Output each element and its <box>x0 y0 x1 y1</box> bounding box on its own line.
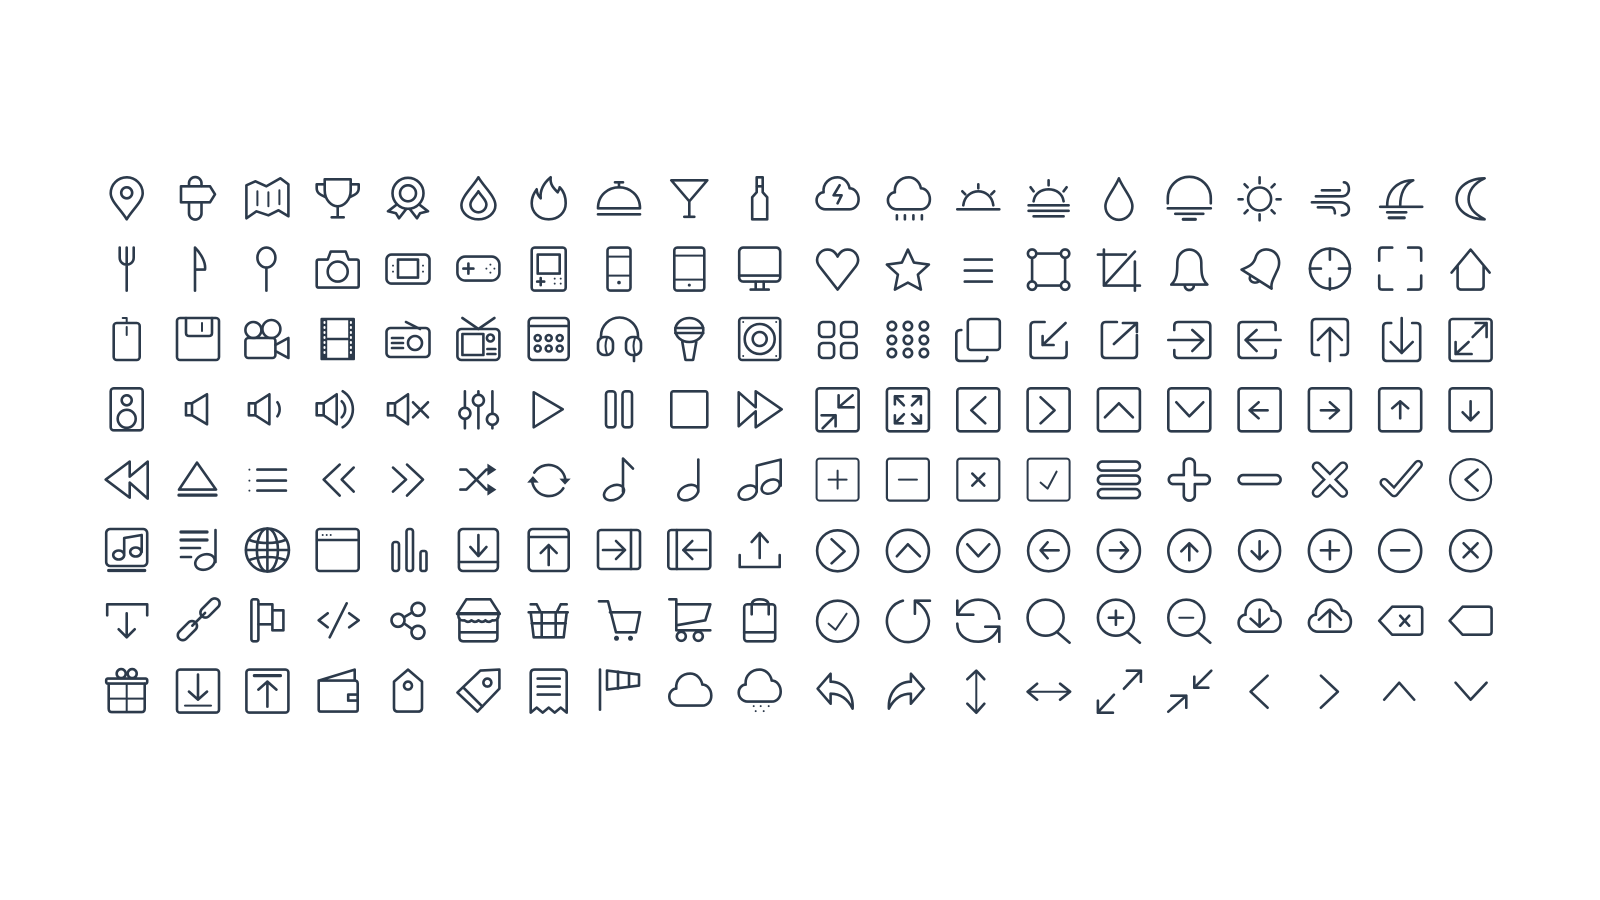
icon: chevron left box <box>957 388 999 431</box>
icon: service bell <box>598 182 640 214</box>
icon: flag <box>251 599 283 641</box>
icon: camera <box>317 252 359 288</box>
icon: cloud rain <box>888 177 930 219</box>
icon: cloud lightning <box>817 177 859 209</box>
icon: focus frame <box>1379 248 1421 290</box>
icon: chevron right circle <box>817 530 858 571</box>
icon: zoom in <box>1098 600 1140 643</box>
icon: star <box>887 250 929 290</box>
icon: arrow left circle <box>1028 530 1069 571</box>
icon: bar chart <box>392 529 426 571</box>
icon: compress arrows <box>1168 671 1211 712</box>
icon: device with antenna <box>114 318 140 360</box>
icon: menu lines <box>965 260 992 282</box>
icon: game boy <box>532 248 566 291</box>
icon: crop <box>1098 250 1140 291</box>
icon: cloud upload <box>1309 600 1351 632</box>
icon: repeat sync <box>527 465 571 496</box>
icon: bottle <box>752 177 767 219</box>
icon: calendar grid <box>529 318 569 360</box>
icon: check box <box>1028 459 1070 501</box>
icon: minus circle <box>1379 530 1421 572</box>
icon: cloud download <box>1239 600 1281 632</box>
icon: globe <box>246 528 289 572</box>
icon: headphones <box>598 318 641 361</box>
icon: wind <box>1312 182 1349 215</box>
icon: award rosette <box>388 178 428 218</box>
icon: chevron right box <box>1028 388 1070 431</box>
icon: heart <box>817 250 858 290</box>
icon: compress in box <box>817 388 859 431</box>
icon: crescent moon <box>1457 178 1485 219</box>
icon: speaker square <box>739 318 780 360</box>
icon: eject <box>179 463 216 495</box>
icon: volume mute <box>388 394 428 424</box>
icon: import right panel <box>598 530 640 569</box>
icon: rewind <box>106 462 148 499</box>
icon: tablet <box>674 248 704 291</box>
icon: zoom out <box>1168 600 1210 643</box>
icon: shopping basket <box>529 604 568 637</box>
icon: spoon <box>257 248 275 291</box>
icon: check circle <box>817 601 858 642</box>
icon: chevron up box <box>1098 388 1140 431</box>
icon: phone <box>608 248 630 291</box>
icon: knife <box>195 248 205 291</box>
icon: play <box>534 392 563 427</box>
icon: shopping trolley <box>669 599 710 641</box>
icon: upload from box <box>1312 319 1348 361</box>
icon: stop <box>671 391 707 427</box>
icon: check outline <box>1384 465 1418 493</box>
icon: desktop monitor <box>739 248 780 290</box>
icon: arrow down circle <box>1239 530 1280 571</box>
icon: browser window <box>317 529 359 571</box>
icon: download box <box>177 670 219 713</box>
icon: minus box <box>887 459 929 501</box>
icon: price tag <box>457 670 499 712</box>
icon: cloud <box>669 674 711 706</box>
icon: four squares <box>819 322 857 358</box>
icon: ringing bell <box>1242 249 1279 289</box>
icon: floppy disk <box>177 318 219 360</box>
icon: bell <box>1171 250 1207 290</box>
icon: gas flame drop <box>461 177 495 219</box>
icon: cloud snow <box>739 670 781 711</box>
icon: chevron right <box>1321 676 1338 708</box>
icon: logout arrow <box>1239 322 1281 358</box>
icon: music note flag <box>602 459 633 503</box>
icon: microphone <box>675 318 703 360</box>
icon: sliders <box>459 391 498 428</box>
icon: chevron down circle <box>957 530 999 572</box>
icon: close circle <box>1450 530 1491 571</box>
icon: download into box <box>1383 318 1420 361</box>
icon: volume high <box>317 391 353 427</box>
icon: expand arrows <box>1098 671 1141 713</box>
icon: martini glass <box>671 180 707 217</box>
icon: backspace <box>1379 607 1422 635</box>
icon: moon over sea <box>1380 180 1422 218</box>
icon: plus circle <box>1309 530 1351 572</box>
icon: crosshair target <box>1310 249 1350 290</box>
icon: volume medium <box>249 394 280 424</box>
icon: half sun horizon <box>1168 177 1211 219</box>
icon: water drop <box>1105 178 1132 220</box>
icon: arrow out of box <box>1102 322 1137 358</box>
icon: television <box>457 318 499 360</box>
icon: minus pill <box>1239 475 1281 484</box>
icon: reply <box>818 674 853 709</box>
icon: arrow right circle <box>1098 530 1140 572</box>
icon: sync arrows <box>957 600 999 642</box>
icon: sunset over lines <box>1029 180 1069 216</box>
icon: arrow right box <box>1309 388 1351 431</box>
icon: gift box <box>106 669 147 712</box>
icon: vertical double arrow <box>967 671 984 713</box>
icon: double chevron right <box>393 465 423 496</box>
icon: upload tablet <box>529 529 569 571</box>
icon: radio <box>386 322 430 357</box>
icon: bullet list <box>249 470 286 491</box>
icon: bounding box <box>1028 249 1069 290</box>
icon: arrow up box <box>1379 388 1421 431</box>
icon: music album <box>106 529 147 570</box>
icon: arrow down box <box>1450 388 1492 431</box>
icon: trophy <box>317 179 359 217</box>
icon: windsock <box>600 670 639 710</box>
icon: plus outline <box>1169 459 1210 501</box>
icon: label <box>1450 607 1492 635</box>
icon: fullscreen in box <box>887 388 929 431</box>
icon: code brackets <box>319 603 359 637</box>
icon: chevron up <box>1384 683 1414 700</box>
icon: map pin <box>111 177 143 219</box>
icon: receipt <box>531 670 567 713</box>
icon: chevron left <box>1251 676 1268 708</box>
icon: tray download <box>107 604 147 637</box>
icon: fast forward <box>739 391 782 427</box>
icon: forward <box>889 674 924 709</box>
icon: volume low <box>186 394 207 424</box>
icon: wallet <box>319 670 358 712</box>
icon: sunrise <box>957 184 999 209</box>
icon: chevron up circle <box>887 530 929 572</box>
icon: video camera <box>245 320 288 358</box>
icon: pause <box>606 391 632 427</box>
icon: shopping cart <box>599 601 640 641</box>
icon: music note <box>676 460 701 503</box>
icon: arrow left box <box>1239 388 1281 431</box>
icon: chevron left circle <box>1450 459 1491 500</box>
icon: horizontal double arrow <box>1028 684 1070 700</box>
icon: storefront <box>457 599 499 641</box>
icon: plus box <box>817 459 859 501</box>
icon: playlist note <box>181 530 217 572</box>
icon: share nodes <box>392 603 424 639</box>
icon: arrow into box <box>1031 322 1067 358</box>
icon: search <box>1028 600 1070 643</box>
icon: shuffle <box>460 464 496 496</box>
icon: home arrow <box>1452 250 1490 290</box>
icon: download tablet <box>459 529 498 571</box>
icon: handheld console <box>386 255 430 284</box>
icon: chevron down box <box>1168 388 1210 431</box>
icon: upload box <box>246 670 288 713</box>
icon: fork <box>120 248 134 291</box>
icon: map <box>246 178 288 218</box>
icon: fire <box>532 177 566 219</box>
icon: sun <box>1239 177 1281 220</box>
icon: stacked pills <box>1098 462 1140 498</box>
icon: nine dots <box>888 322 928 357</box>
icon: copy <box>956 319 1000 361</box>
icon: chain link <box>176 596 222 642</box>
icon: login arrow <box>1168 322 1210 358</box>
icon: close box <box>957 459 999 501</box>
icon: double music note <box>736 460 782 503</box>
icon: film strip <box>322 319 354 359</box>
icon: arrow up circle <box>1168 530 1210 572</box>
icon: shopping bag <box>744 599 775 641</box>
icon: double chevron left <box>324 465 354 496</box>
icon: expand in box <box>1450 319 1492 361</box>
icon: chevron down <box>1456 683 1487 700</box>
icon: signpost <box>181 177 215 220</box>
icon: refresh <box>887 601 930 642</box>
icon: hanging tag <box>394 670 422 712</box>
icon: import left panel <box>668 530 710 569</box>
icon: gamepad <box>457 257 499 281</box>
icon: close outline <box>1317 467 1343 493</box>
icon: speaker box <box>111 388 143 430</box>
icon: share upload <box>740 533 780 567</box>
